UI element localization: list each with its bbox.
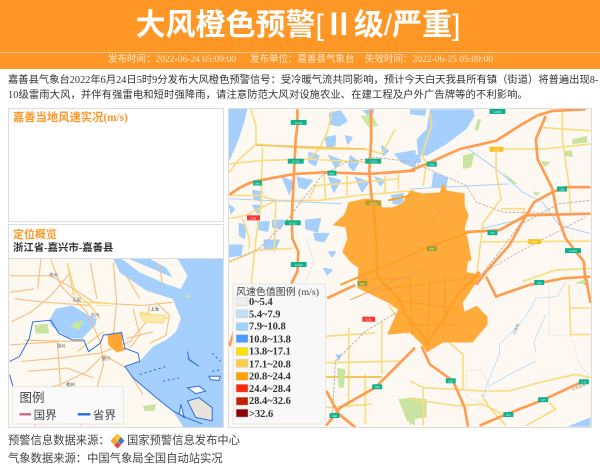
map layers: south-east: 红旗塘 bbox=[512, 323, 520, 335]
highway shields: G60 bbox=[375, 386, 380, 389]
highway shields: S32 bbox=[490, 232, 495, 235]
locator map: 嘉兴 bbox=[102, 355, 111, 362]
highway shields: G1503 bbox=[494, 111, 502, 114]
locator map: 湖州 bbox=[57, 343, 66, 350]
locator map bbox=[8, 258, 224, 428]
source: weather data: 气象数据来源：中国气象局全国自动站实况 bbox=[8, 453, 223, 465]
locator map: 常州 bbox=[49, 271, 58, 278]
wind speed legend bbox=[233, 284, 326, 424]
highway shields: G1521 bbox=[369, 161, 378, 164]
wind speed legend: >32.6 bbox=[249, 409, 273, 420]
highway shields: G1522 bbox=[292, 161, 300, 164]
highway shields: S36 bbox=[537, 282, 542, 285]
panel: wind observations bbox=[8, 108, 224, 222]
main wind map bbox=[228, 108, 592, 428]
source: warning data: 预警信息数据来源： bbox=[8, 435, 110, 447]
wind speed legend: 13.8~17.1 bbox=[249, 346, 291, 357]
highway shields: G1522 bbox=[295, 122, 303, 125]
highway shields: G60 bbox=[332, 415, 337, 418]
highway shields: G60 bbox=[560, 188, 565, 191]
highway shields: S32 bbox=[430, 248, 435, 251]
wind speed legend: 风速色值图例 (m/s) bbox=[236, 285, 319, 298]
header banner bbox=[0, 0, 600, 69]
wind speed legend: 28.4~32.6 bbox=[249, 396, 291, 407]
highway shields: S324 bbox=[531, 241, 538, 244]
locator map: 无锡 bbox=[72, 296, 81, 303]
divider bbox=[0, 52, 600, 53]
location path: 浙江省-嘉兴市-嘉善县 bbox=[13, 243, 113, 254]
map layers: north-west bbox=[229, 109, 415, 285]
wind speed legend: 20.8~24.4 bbox=[249, 371, 292, 382]
wind speed legend: 24.4~28.4 bbox=[249, 384, 292, 395]
location heading: 定位概览 bbox=[13, 229, 57, 241]
panel: location overview bbox=[8, 224, 224, 259]
highway shields: G15 bbox=[582, 381, 587, 384]
wind speed legend: 17.1~20.8 bbox=[249, 359, 291, 370]
highway shields: G15 bbox=[506, 414, 511, 417]
title: 大风橙色预警[Ⅱ级/严重] bbox=[135, 9, 461, 42]
warning description: 10级雷雨大风，并伴有强雷电和短时强降雨，请注意防范大风对设施农业、在建工程及户外广告牌等的不利影响。 bbox=[8, 90, 528, 100]
roads inside warning area bbox=[340, 195, 480, 345]
locator legend: 图例 bbox=[19, 391, 44, 405]
wind speed legend: 0~5.4 bbox=[249, 297, 273, 308]
locator map: 苏州 bbox=[91, 312, 99, 319]
highway shields: G60 bbox=[255, 183, 260, 186]
map layers: south-east: 沈海高速 bbox=[571, 382, 586, 392]
wind speed legend: 10.8~13.8 bbox=[249, 335, 291, 346]
highway shields: G60 bbox=[329, 173, 334, 176]
highway shields: G1522 bbox=[289, 222, 297, 225]
locator legend: 省界 bbox=[93, 409, 116, 422]
highway shields: G318 bbox=[250, 217, 257, 220]
highway shields: G15 bbox=[541, 399, 546, 402]
highway shields: G1503 bbox=[569, 250, 577, 253]
wind speed legend: 5.4~7.9 bbox=[249, 310, 280, 321]
locator legend: 国界 bbox=[34, 409, 57, 422]
expiry time: 失效时间：2022-06-25 05:09:00 bbox=[365, 55, 493, 65]
map layers: north-east bbox=[410, 109, 591, 285]
locator map: 杭州 bbox=[66, 381, 75, 388]
wind heading: 嘉善当地风速实况(m/s) bbox=[13, 112, 128, 124]
locator legend bbox=[13, 387, 123, 424]
source: warning centre name: 国家预警信息发布中心 bbox=[127, 435, 240, 447]
highway shields bbox=[247, 109, 589, 418]
wind speed legend: 7.9~10.8 bbox=[249, 322, 286, 333]
highway shields: G1522 bbox=[295, 264, 303, 267]
wind warning area bbox=[332, 183, 488, 352]
highway shields: S32 bbox=[360, 283, 365, 286]
highway shields: G1521 bbox=[369, 202, 378, 205]
issue time: 发布时间：2022-06-24 05:09:00 bbox=[108, 55, 236, 65]
issuing unit: 发布单位：嘉善县气象台 bbox=[250, 55, 355, 65]
map layers: south-west bbox=[229, 275, 415, 427]
locator map: 上海 bbox=[150, 305, 160, 312]
map layers: south-east bbox=[410, 275, 591, 427]
highway shields: G92 bbox=[448, 380, 454, 383]
warning description: 嘉善县气象台2022年6月24日5时9分发布大风橙色预警信号：受冷暖气流共同影响，预计今天白天我县所有镇（街道）将普遍出现8- bbox=[8, 75, 598, 86]
highway shields: S320 bbox=[365, 319, 372, 322]
highway shields: G60 bbox=[429, 164, 435, 167]
icon: warning centre logo bbox=[110, 434, 124, 448]
warning description bbox=[8, 74, 598, 100]
highway shields: S225 bbox=[494, 149, 500, 152]
